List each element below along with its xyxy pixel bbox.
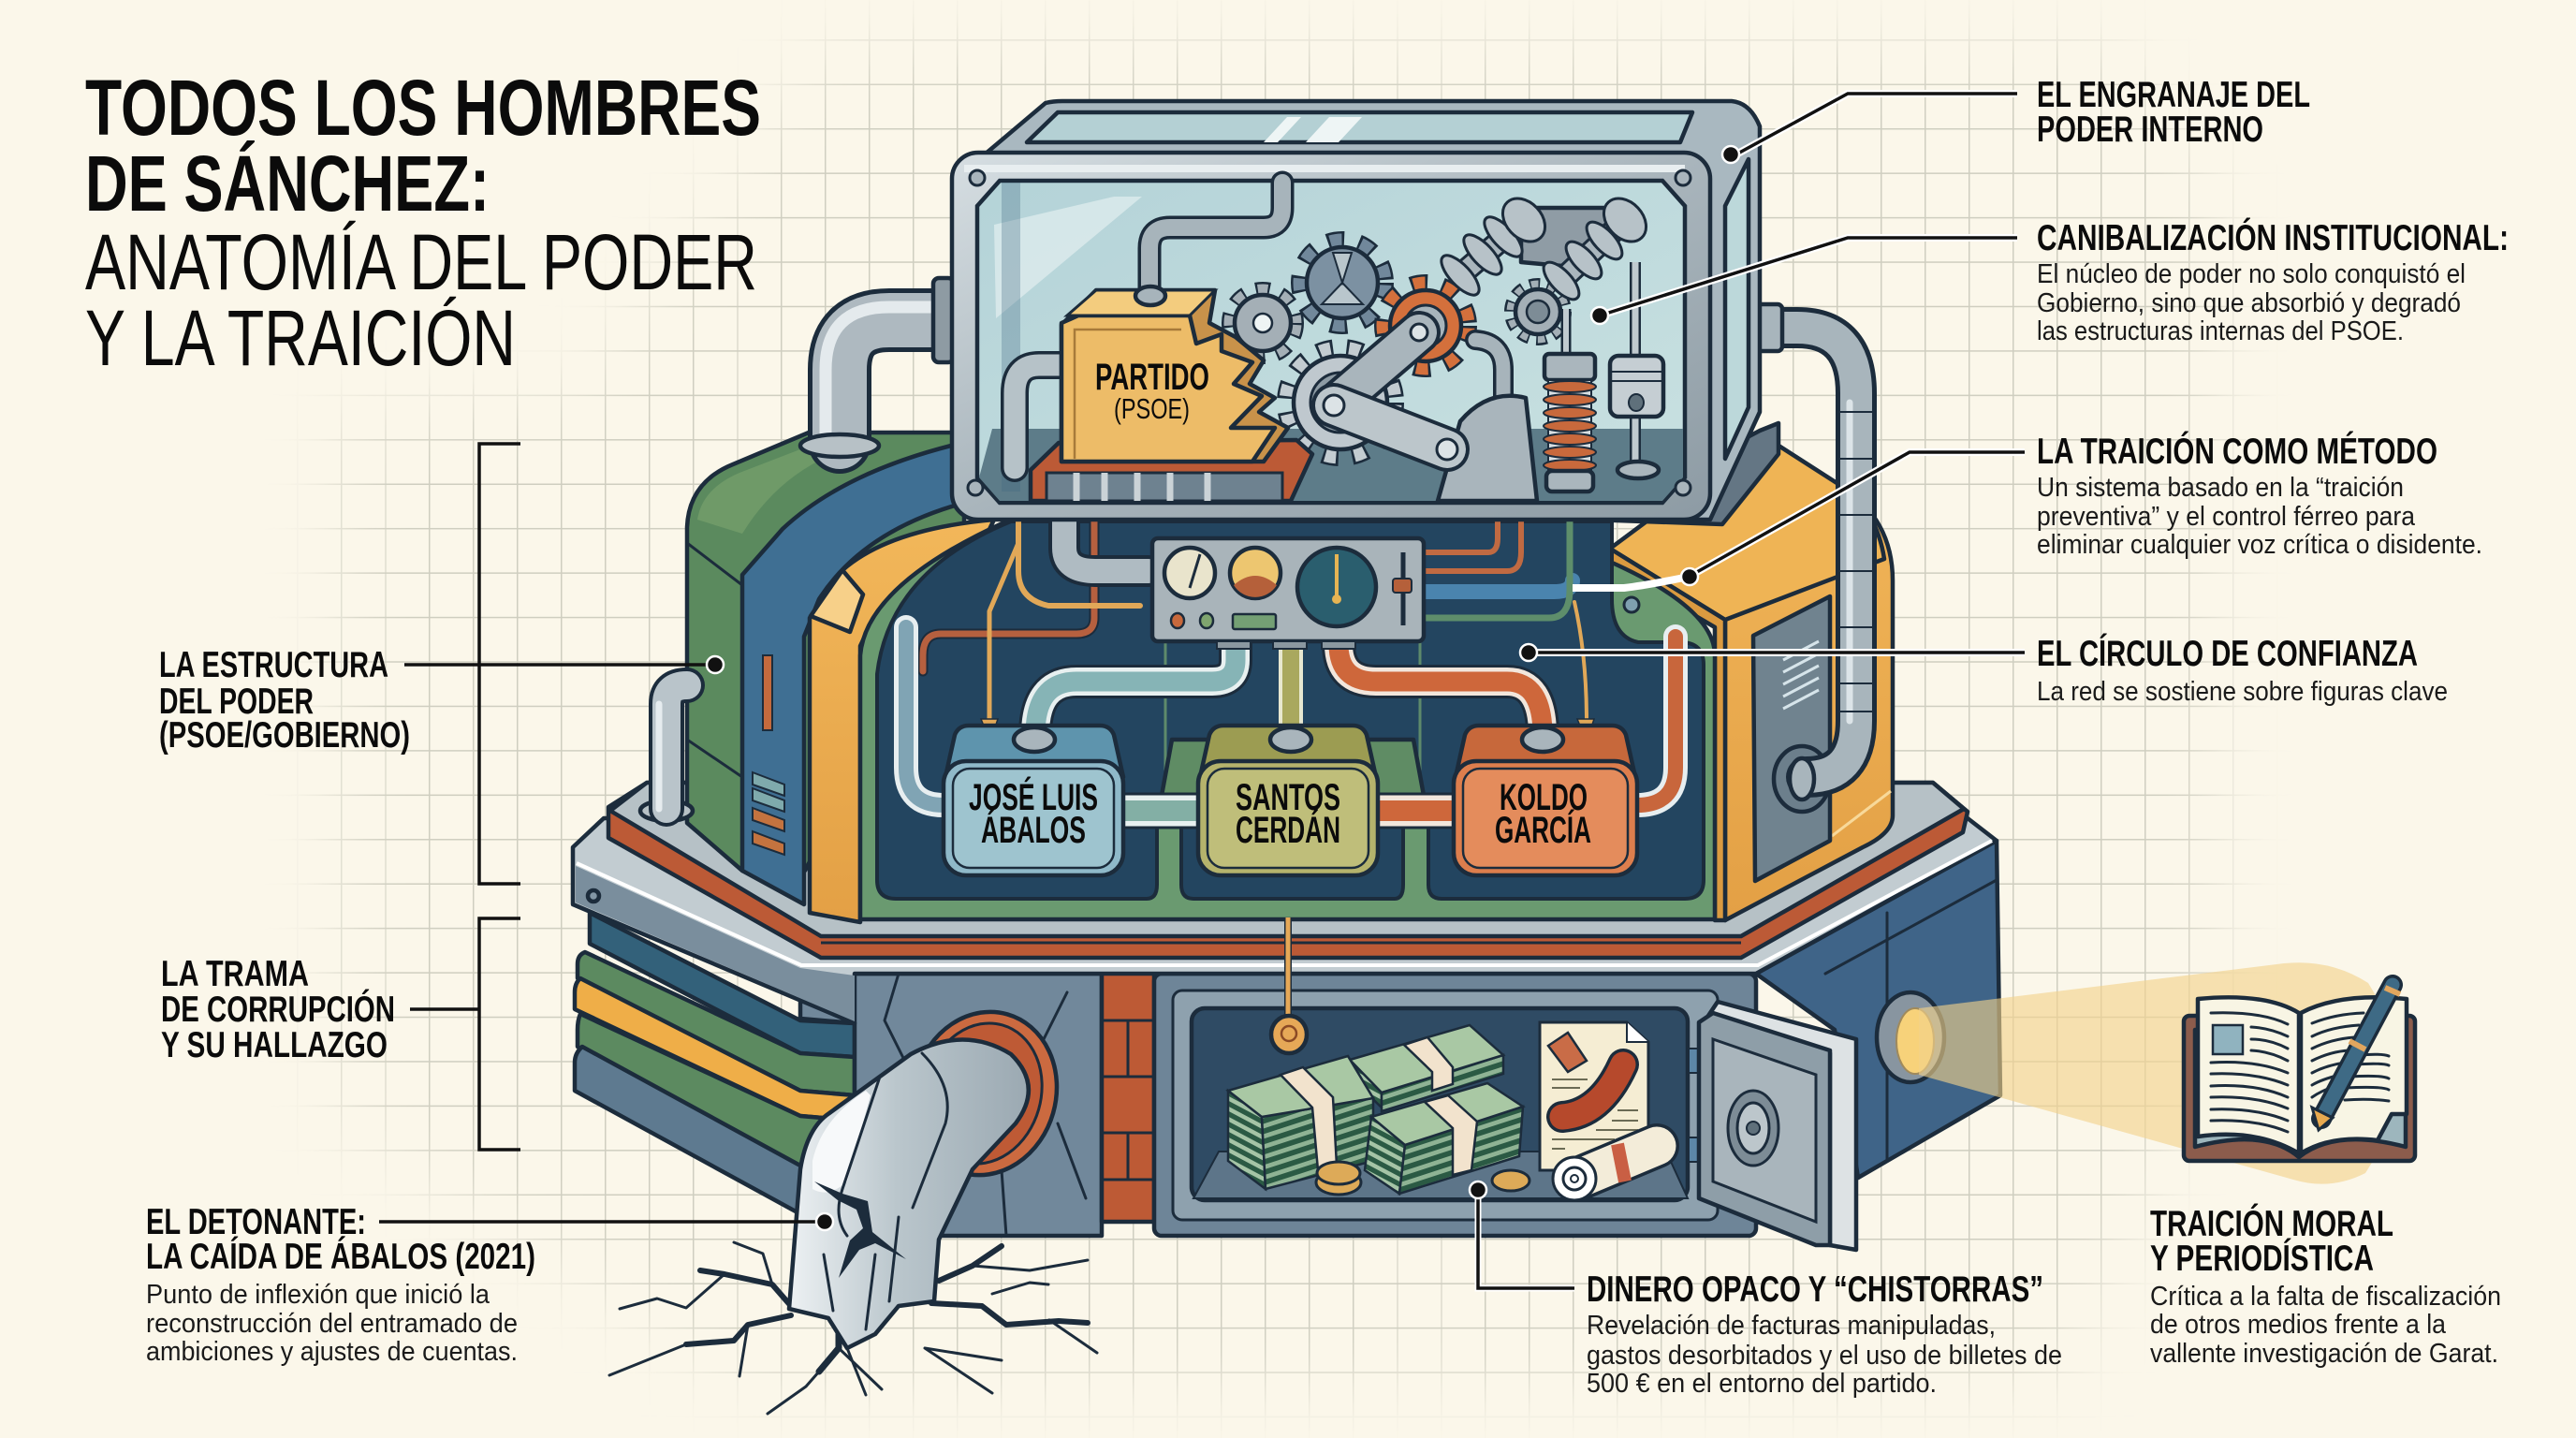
camshafts <box>1436 190 1655 305</box>
box top and side <box>973 101 1760 520</box>
label: trama: LA TRAMA <box>161 954 309 994</box>
label: detonante: LA CAÍDA DE ÁBALOS (2021) <box>146 1236 535 1277</box>
bolts <box>968 170 1690 495</box>
label: partido: PARTIDO <box>1095 357 1209 398</box>
leader: traición <box>1573 452 2025 588</box>
box: José Luis Ábalos: ÁBALOS <box>981 809 1086 851</box>
cabinet: blue band <box>742 445 955 904</box>
label: traición moral <box>2150 1203 2501 1369</box>
leader: trama <box>410 1007 479 1011</box>
red flange <box>894 994 1076 1193</box>
box: Koldo García: KOLDO <box>1500 777 1588 818</box>
broken party block: (PSOE) <box>1114 392 1190 425</box>
green block behind Santos <box>1159 740 1427 811</box>
label: detonante: Punto de inflexión que inició la <box>146 1280 490 1310</box>
label: el engranaje <box>2037 75 2310 150</box>
label: estructura <box>159 645 410 756</box>
label: la traición: eliminar cualquier voz crítica o disidente. <box>2037 530 2482 560</box>
cash stack back <box>1350 1025 1503 1111</box>
label: canibalización: El núcleo de poder no solo conquistó el <box>2037 259 2466 289</box>
teal pipe <box>1035 644 1236 735</box>
spring <box>1544 309 1596 492</box>
title: TODOS LOS HOMBRES <box>85 64 761 152</box>
coins <box>1316 1162 1530 1195</box>
label: dinero: DINERO OPACO Y “CHISTORRAS” <box>1587 1269 2043 1310</box>
title: ANATOMÍA DEL PODER <box>85 218 757 306</box>
connectors <box>1120 794 1202 828</box>
safe door <box>1699 1002 1856 1250</box>
label: traición moral: de otros medios frente a la <box>2150 1310 2447 1340</box>
label: traición moral: TRAICIÓN MORAL <box>2150 1203 2393 1244</box>
label: trama <box>161 954 395 1065</box>
reflections <box>994 197 1142 318</box>
glass window <box>977 181 1685 503</box>
title <box>85 64 761 382</box>
right blue side <box>1756 841 2000 1178</box>
external pipe: left <box>800 278 954 457</box>
label: detonante: EL DETONANTE: <box>146 1202 366 1242</box>
label: detonante: ambiciones y ajustes de cuentas. <box>146 1337 518 1367</box>
chistorra document <box>1540 1022 1648 1170</box>
leader: detonante <box>379 1213 833 1230</box>
label: trama: Y SU HALLAZGO <box>161 1025 388 1065</box>
label: círculo: La red se sostiene sobre figuras clave <box>2037 677 2448 707</box>
label: la traición: LA TRAICIÓN COMO MÉTODO <box>2037 431 2437 472</box>
safe front panel <box>1154 974 1756 1236</box>
box: Koldo García <box>1454 726 1637 875</box>
label: círculo: EL CÍRCULO DE CONFIANZA <box>2037 633 2418 674</box>
red stand <box>1031 440 1312 501</box>
label: detonante <box>146 1202 535 1367</box>
leader: círculo <box>1520 644 2025 661</box>
cracked panel <box>800 974 1102 1236</box>
ground cracks <box>609 1242 1097 1414</box>
bracket: estructura <box>479 444 520 884</box>
label: estructura: LA ESTRUCTURA <box>159 645 388 685</box>
navy interior <box>877 521 1704 899</box>
label: trama: DE CORRUPCIÓN <box>161 989 395 1030</box>
label: la traición: Un sistema basado en la “traición <box>2037 473 2404 503</box>
cash stack front <box>1365 1083 1523 1194</box>
gears <box>1231 242 1563 455</box>
cabinet: orange band <box>810 520 994 922</box>
box: Santos Cerdán: CERDÁN <box>1236 809 1340 851</box>
small left pipe <box>640 685 693 821</box>
pen <box>2321 985 2393 1119</box>
right orange cabinet <box>1610 435 1893 920</box>
front frame <box>952 153 1710 520</box>
internal pipes <box>906 521 1676 828</box>
safe contents <box>1228 1022 1657 1200</box>
left striped side <box>575 913 855 1226</box>
box: Santos Cerdán: SANTOS <box>1236 777 1340 818</box>
box: José Luis Ábalos <box>944 726 1123 875</box>
green interior frame <box>860 521 1715 919</box>
book and pen <box>2184 985 2415 1161</box>
label: estructura: (PSOE/GOBIERNO) <box>159 715 410 756</box>
box: José Luis Ábalos: JOSÉ LUIS <box>969 776 1098 818</box>
mount under box <box>1591 423 1778 524</box>
orange wire with pendant <box>1271 917 1307 1053</box>
machine: upper cabinet <box>640 433 1893 922</box>
label: traición moral: vallente investigación de Garat. <box>2150 1339 2498 1369</box>
left page <box>2198 997 2299 1153</box>
safe cavity <box>1192 1008 1700 1200</box>
blueprint grid <box>307 17 2248 1416</box>
right page <box>2301 997 2407 1153</box>
glass mechanism box <box>952 101 1778 524</box>
label: la traición <box>2037 431 2482 560</box>
broken party block <box>1061 286 1288 462</box>
cash stack left <box>1228 1056 1373 1189</box>
brick column <box>1102 961 1154 1222</box>
leader: canibalización <box>1591 238 2017 324</box>
vent panel <box>1753 596 1830 881</box>
glass floor <box>979 429 1683 501</box>
bracket: trama <box>479 918 520 1150</box>
crack in pipe <box>814 1181 906 1278</box>
connecting arms <box>1324 324 1457 460</box>
pipe body <box>789 1039 1029 1348</box>
cabinet: green shell <box>687 433 964 871</box>
title: Y LA TRAICIÓN <box>85 294 516 382</box>
label: dinero: Revelación de facturas manipuladas, <box>1587 1311 1996 1341</box>
label: canibalización: las estructuras internas del PSOE. <box>2037 316 2404 346</box>
label: traición moral: Y PERIODÍSTICA <box>2150 1238 2374 1279</box>
olive pipe <box>1279 644 1303 735</box>
box: Koldo García: GARCÍA <box>1495 809 1591 851</box>
light beam <box>1919 962 2396 1184</box>
box: Santos Cerdán <box>1198 726 1378 875</box>
label: dinero <box>1587 1269 2062 1399</box>
cracked pipe <box>789 994 1076 1348</box>
leader: dinero <box>1470 1181 1574 1288</box>
small pipe near orange gear <box>1475 340 1503 407</box>
scroll <box>1553 1144 1657 1200</box>
label: la traición: preventiva” y el control férreo para <box>2037 502 2416 532</box>
red plate <box>608 783 1968 958</box>
leader: engranaje <box>1722 94 2017 163</box>
label: dinero: 500 € en el entorno del partido. <box>1587 1369 1937 1399</box>
piston <box>1610 262 1663 478</box>
label: canibalización: Gobierno, sino que absorbió y degradó <box>2037 288 2461 318</box>
label: traición moral: Crítica a la falta de fiscalización <box>2150 1282 2501 1312</box>
porthole <box>1877 992 1944 1082</box>
label: detonante: reconstrucción del entramado de <box>146 1309 518 1339</box>
label: círculo <box>2037 633 2448 707</box>
label: canibalización <box>2037 217 2509 346</box>
orange pipe <box>1339 644 1543 735</box>
external pipe: right <box>1729 293 1872 800</box>
label: dinero: gastos desorbitados y el uso de billetes de <box>1587 1341 2062 1371</box>
mechanism base block <box>1438 396 1537 501</box>
leader: estructura <box>404 656 724 673</box>
upper silver plate <box>573 818 1997 1023</box>
label: el engranaje: EL ENGRANAJE DEL <box>2037 75 2310 115</box>
label: estructura: DEL PODER <box>159 682 314 722</box>
pipes in glass <box>1149 183 1282 293</box>
control panel with gauges <box>1152 538 1424 649</box>
machine: lower base <box>573 783 2000 1236</box>
title: DE SÁNCHEZ: <box>85 139 490 227</box>
label: el engranaje: PODER INTERNO <box>2037 110 2263 150</box>
